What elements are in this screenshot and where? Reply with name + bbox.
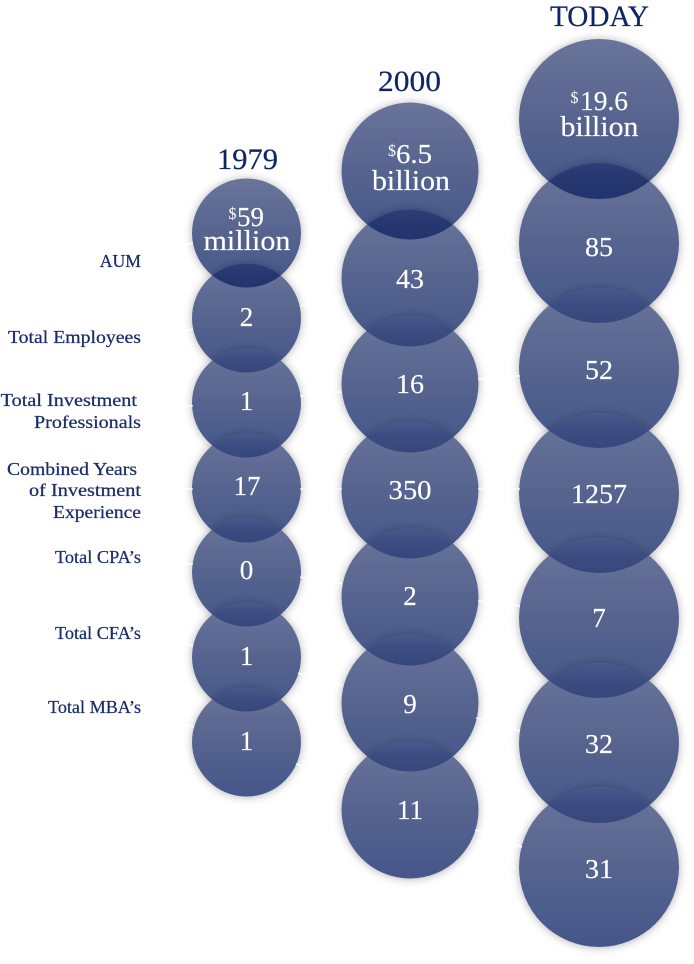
bubble: Total Investment Professionals 16 [342, 316, 478, 452]
bubble: Total Investment Professionals 1 [192, 348, 301, 458]
heading: TODAY: TODAY [550, 0, 649, 33]
bubble: Total Investment Professionals 52 [519, 288, 679, 448]
bubble: AUM $59 million: $ [228, 204, 236, 223]
bubble: Total MBA's 1: 1 [240, 726, 253, 756]
bubble: Total Employees 43 [342, 210, 478, 346]
bubble: Combined Years 1257: 1257 [571, 479, 627, 509]
bubble: Total CPA's 0 [192, 518, 301, 626]
bubble: Total CFA's 32 [519, 663, 679, 823]
bubble: AUM $6.5 billion: 6.5 [396, 139, 432, 169]
bubble: Total CFA's 9 [342, 634, 478, 772]
bubble: Total Employees 85 [519, 163, 679, 323]
bubble: Total Investment Professionals 52: 52 [585, 355, 613, 385]
label: Combined Years of Investment Experience: Experience [53, 502, 141, 522]
bubble: AUM $6.5 billion: billion [372, 165, 451, 197]
column: 1979 [192, 143, 301, 796]
connector ticks between bubbles [184, 137, 522, 847]
bubble: Combined Years 350: 350 [388, 475, 432, 505]
bubble: AUM $6.5 billion [342, 102, 478, 240]
bubble: Total Investment Professionals 16: 16 [396, 369, 424, 399]
bubble: Total Employees 2 [192, 264, 301, 372]
bubble: AUM $19.6 billion: 19.6 [580, 86, 628, 116]
bubble: Total CFA's 32: 32 [585, 729, 613, 759]
label: Combined Years of Investment Experience: of Investment [29, 480, 141, 500]
label: Total Investment Professionals: Total Investment [1, 390, 137, 410]
label: Total MBA's: Total MBA’s [48, 697, 141, 717]
label: Total CPA's: Total CPA’s [55, 547, 141, 567]
bubble: Total Employees 85: 85 [585, 232, 613, 262]
bubble: AUM $6.5 billion: $ [388, 141, 396, 160]
row labels [1, 251, 141, 717]
bubble: Total MBA's 1 [192, 688, 301, 796]
label: Combined Years of Investment Experience [7, 459, 141, 522]
bubble: Total CFA's 9: 9 [403, 689, 417, 719]
bubble: Total MBA's 11 [342, 742, 478, 878]
bubble: Combined Years 17 [192, 434, 301, 542]
bubble: Total MBA's 11: 11 [397, 795, 423, 825]
bubble: Combined Years 1257 [519, 413, 679, 573]
bubble: AUM $19.6 billion: $ [570, 88, 578, 107]
heading: 2000: 2000 [378, 65, 441, 98]
bubble: Total MBA's 31 [519, 787, 679, 947]
bubble: AUM $59 million [192, 178, 301, 288]
bubble: Total Employees 43: 43 [396, 264, 424, 294]
bubble: AUM $59 million: million [204, 225, 291, 257]
bubble: Total Investment Professionals 1: 1 [240, 386, 253, 416]
bubble: Total CFA's 1: 1 [240, 641, 253, 671]
bubble: AUM $19.6 billion: billion [560, 111, 639, 143]
bubble: Total CPA's 0: 0 [240, 555, 253, 585]
label: Combined Years of Investment Experience: Combined Years [7, 459, 137, 479]
column: 2000 [342, 65, 478, 878]
bubble: AUM $19.6 billion [519, 39, 679, 199]
bubble: Combined Years 350 [342, 422, 478, 558]
bubble: Total CPA's 7 [519, 538, 679, 698]
bubble: Total CPA's 2: 2 [403, 581, 417, 611]
label: Total CFA's: Total CFA’s [55, 623, 141, 643]
label: Total Investment Professionals: Professionals [34, 412, 141, 432]
bubble: Total CPA's 2 [342, 528, 478, 666]
bubble: Total CFA's 1 [192, 602, 301, 712]
bubble: AUM $59 million: 59 [237, 202, 264, 232]
column: TODAY [519, 0, 679, 947]
label: AUM: AUM [100, 251, 141, 271]
label: Total Employees: Total Employees [8, 327, 141, 347]
bubble: Total CPA's 7: 7 [592, 603, 606, 633]
label: Total Investment Professionals [1, 390, 141, 432]
bubble: Total Employees 2: 2 [240, 302, 253, 332]
bubble: Total MBA's 31: 31 [585, 854, 613, 884]
bubble: Combined Years 17: 17 [234, 471, 260, 501]
heading: 1979: 1979 [217, 143, 278, 176]
